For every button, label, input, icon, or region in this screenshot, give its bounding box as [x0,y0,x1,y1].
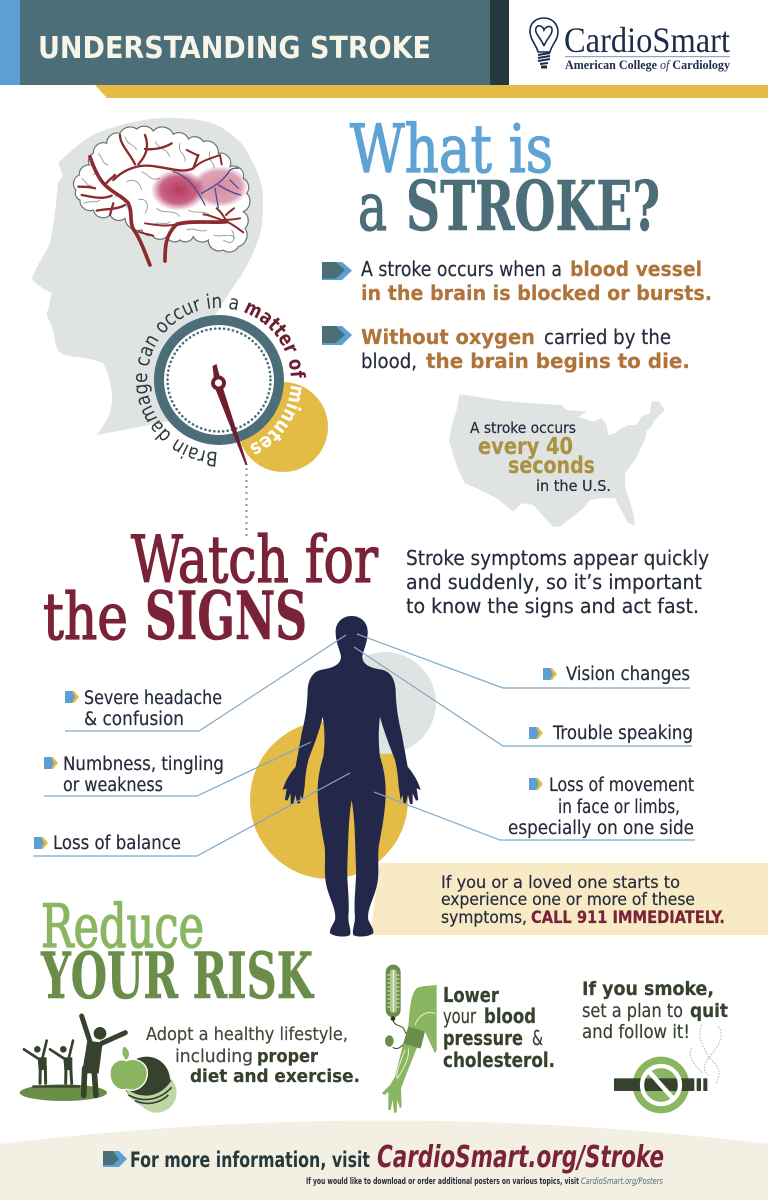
callout: call 911: experience one or more of these [441,890,695,909]
text: blood pressure: pressure [443,1026,523,1050]
illustration: head with brain [32,118,263,435]
human body silhouette [283,616,421,937]
sign: severe headache: Severe headache [84,688,222,709]
sign: loss of movement: in face or limbs, [558,797,680,818]
heading: Reduce your risk: YOUR RISK [40,939,314,1014]
logo wordmark: CardioSmart [564,20,730,60]
bullet arrow [322,326,352,345]
text: quit smoking: If you smoke, [582,978,714,1000]
body backdrop circles [250,652,436,879]
text: healthy lifestyle: Adopt a healthy lifestyle, [146,1024,348,1045]
clock needle [211,364,248,465]
callout: call 911: symptoms, [441,908,527,927]
signs intro text [406,546,709,618]
text: healthy lifestyle: proper [257,1046,318,1067]
head silhouette [32,118,263,435]
US map with statistic [449,394,665,527]
signs intro text: and suddenly, so it’s important [406,570,702,594]
gold circle [238,382,328,472]
text: blood pressure: blood [484,1004,536,1028]
callout: call 911 [370,863,768,935]
heading: Watch for the signs: the [43,580,128,655]
point: without oxygen [322,325,690,373]
footer band: CardioSmart.org/Stroke [377,1140,664,1175]
text: blood pressure: your [443,1004,476,1028]
point: blood vessel blocked [322,257,712,305]
heading: Watch for the signs: Watch for [131,523,378,598]
point: blood vessel blocked: in the brain is blocked or bursts. [361,281,712,305]
text: healthy lifestyle [146,1024,360,1087]
text: blood pressure: Lower [443,983,499,1007]
clock: brain damage timer [136,294,328,472]
US map with statistic: in the U.S. [536,477,611,495]
footer band: CardioSmart.org/Posters [581,1177,663,1187]
icon: people exercising and apple [20,1016,177,1113]
point: without oxygen: blood, [361,349,417,373]
sign: numbness: or weakness [63,775,163,796]
sign: vision changes: Vision changes [566,664,690,685]
sign: trouble speaking: Trouble speaking [552,723,693,744]
point: without oxygen: the brain begins to die. [426,349,690,373]
text: quit smoking [582,978,728,1043]
sign: numbness [44,754,224,796]
footer band [0,1120,768,1200]
text: healthy lifestyle: diet and exercise. [190,1066,360,1087]
callout: call 911: CALL 911 IMMEDIATELY. [531,908,725,927]
sign: severe headache: & confusion [84,709,184,730]
sign: loss of movement [508,775,694,839]
point: blood vessel blocked: A stroke occurs when a [361,257,562,281]
curved caption: Brain damage can occur in a [136,294,238,467]
text: quit smoking: and follow it! [582,1021,690,1043]
bullet arrow [322,262,352,280]
sign: loss of movement: Loss of movement [549,775,694,796]
logo tagline: American College of Cardiology [565,57,730,72]
curved caption: minutes [250,386,302,454]
signs intro text: Stroke symptoms appear quickly [406,546,709,570]
leader lines [33,634,695,856]
point: without oxygen: Without oxygen [361,325,535,349]
map of the US [449,394,665,527]
US map with statistic: A stroke occurs [470,419,576,437]
US map with statistic: every 40 [478,434,573,460]
clock ring [159,320,279,440]
curved caption: matter of [244,302,306,378]
text: quit smoking: quit [690,1000,728,1022]
dotted connector [246,468,248,540]
blood vessels [78,135,243,265]
heading: Watch for the signs: SIGNS [145,577,307,655]
text: blood pressure: cholesterol. [443,1048,555,1072]
heading: Reduce your risk [40,892,314,1014]
text: blood pressure [443,983,555,1072]
icon: no smoking [614,1025,721,1113]
heading: Watch for the signs [43,523,378,655]
point: without oxygen: carried by the [544,325,671,349]
sign: loss of movement: especially on one side [508,818,694,839]
sign: severe headache [65,688,222,730]
footer band: For more information, visit [130,1148,370,1172]
heading: What is a stroke: a [358,169,387,246]
sign: numbness: Numbness, tingling [63,754,224,775]
heading: What is a stroke: STROKE? [406,167,660,247]
header banner [0,0,768,98]
text: blood pressure: & [532,1026,543,1050]
icon: light bulb with heart [530,18,558,67]
text: quit smoking: set a plan to [582,1000,683,1022]
infarct area [151,169,206,211]
sign: loss of balance: Loss of balance [53,833,181,854]
point: blood vessel blocked: blood vessel [570,257,702,281]
heading: What is a stroke: What is [350,111,553,188]
CardioSmart logo [530,18,730,72]
footer band: If you would like to download or order additional posters on various topics, visit [306,1177,579,1187]
brain [74,126,250,265]
header title: UNDERSTANDING STROKE [38,31,431,66]
signs intro text: to know the signs and act fast. [406,594,699,618]
bullet arrow [103,1151,127,1167]
heading: Reduce your risk: Reduce [41,892,204,962]
text: healthy lifestyle: including [175,1046,253,1067]
heading: What is a stroke [350,111,660,247]
icon: arm with blood pressure cuff [382,965,437,1113]
curved caption [136,294,306,467]
callout: call 911: If you or a loved one starts to [441,873,680,892]
US map with statistic: seconds [508,453,595,479]
